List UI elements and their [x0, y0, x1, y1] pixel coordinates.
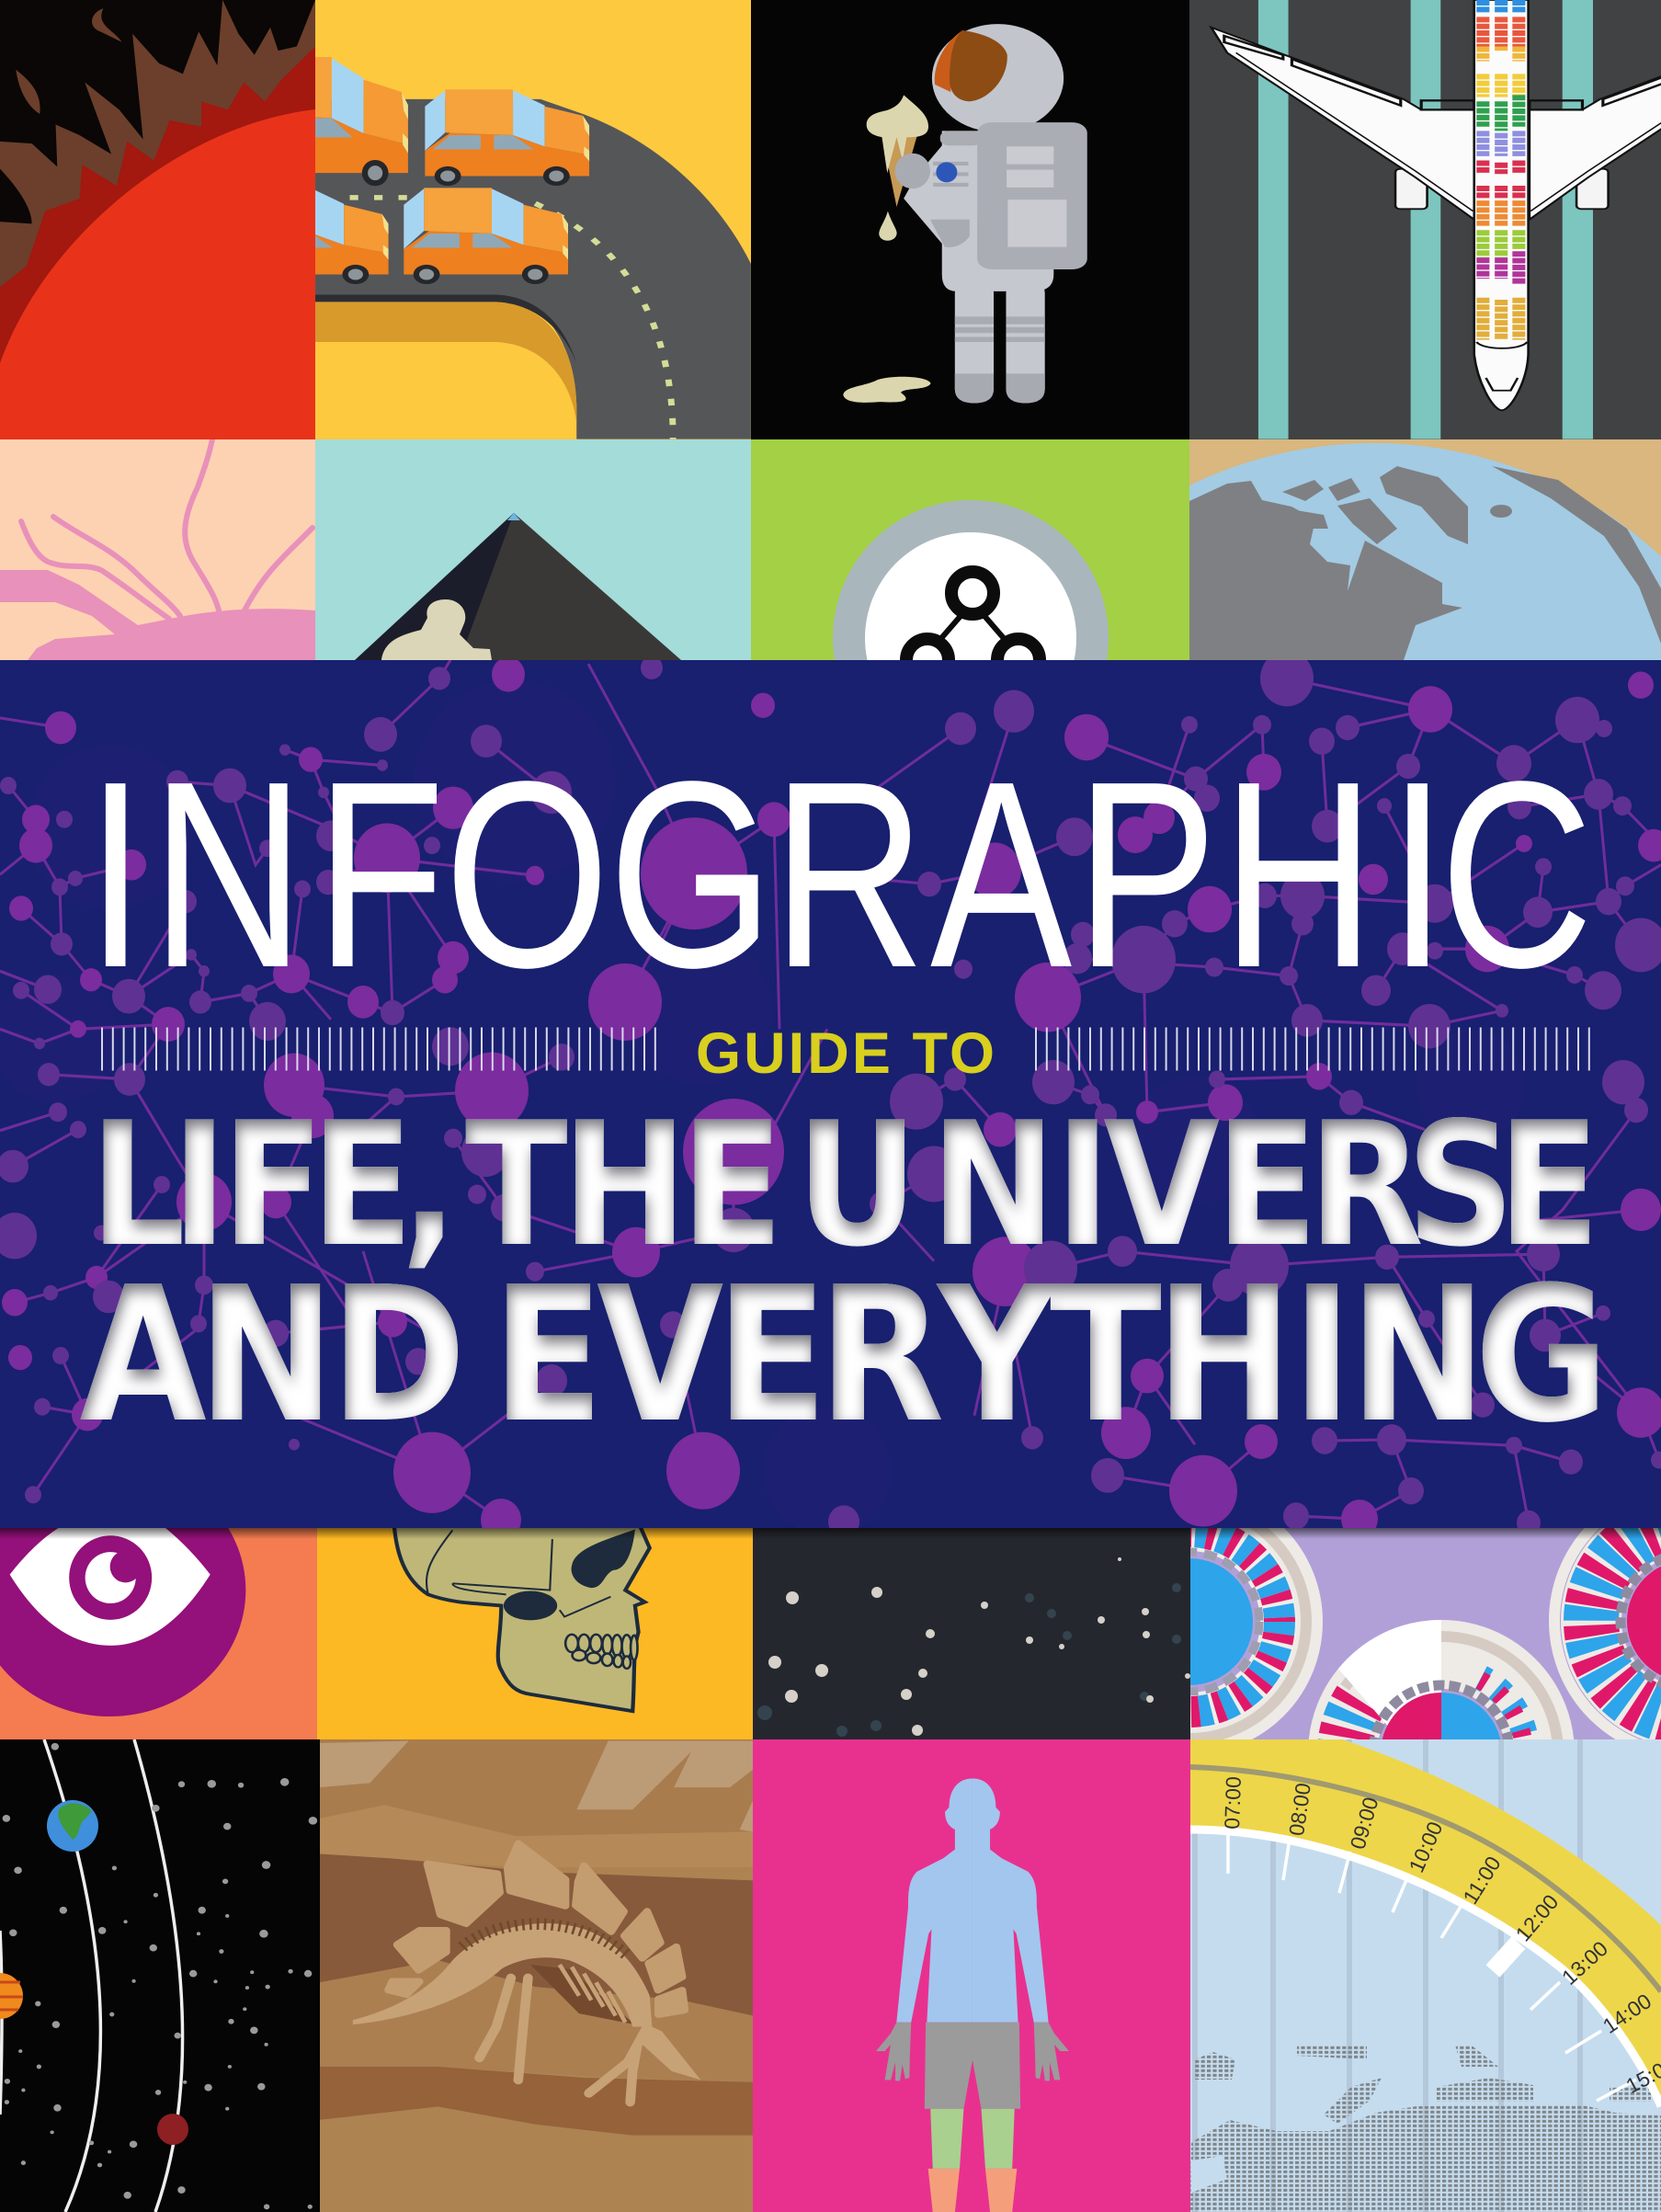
hour labels — [1220, 1776, 1661, 2098]
panel: astronaut with ice cream — [751, 0, 1189, 439]
panel: globe on tan — [1189, 439, 1661, 660]
ice cream cone — [843, 95, 931, 403]
Europe and Africa rim — [1492, 466, 1661, 644]
panel: solar system — [0, 1739, 320, 2212]
white disc — [865, 532, 1076, 744]
hour labels: 14:00 — [1598, 1989, 1655, 2038]
panel: network icon on green — [751, 439, 1189, 660]
dotted world map — [1190, 2045, 1661, 2212]
eye white — [10, 1528, 210, 1646]
hour labels: 13:00 — [1557, 1936, 1612, 1990]
astronaut arm — [895, 145, 977, 247]
background stripes — [1195, 1739, 1580, 2212]
yellow dial band — [1190, 1739, 1661, 2106]
skull — [394, 1526, 650, 1711]
icon: red sun — [0, 109, 315, 439]
panel: human body on pink — [753, 1739, 1190, 2212]
panel: circular charts on lavender — [1190, 1528, 1661, 1739]
panel: title banner — [0, 660, 1661, 1528]
network nodes muted — [0, 650, 1661, 1538]
stegosaurus plates — [388, 1843, 685, 2014]
cars — [224, 57, 589, 284]
icon: dark gap in flames — [0, 169, 32, 223]
stegosaurus gut shadow — [530, 1965, 635, 2024]
hour labels: 07:00 — [1220, 1776, 1246, 1830]
Iceland — [1490, 505, 1512, 518]
panel: pyramid on cyan — [315, 439, 751, 660]
dial white rim — [1190, 1830, 1661, 2106]
panel: night sky stars — [753, 1528, 1190, 1739]
faint background blobs — [0, 680, 1526, 1535]
map gaps — [1191, 2156, 1227, 2193]
road kerb — [315, 295, 576, 363]
body: right half — [973, 1778, 1069, 2212]
panel: eye on coral — [0, 1528, 317, 1739]
sun limb with flare — [0, 570, 315, 660]
divider ruler left — [101, 1028, 658, 1070]
astronaut helmet — [932, 24, 1064, 132]
chart: left radial — [1070, 1502, 1309, 1741]
sphinx — [381, 599, 492, 660]
subtitle: GUIDE TO: GUIDE TO — [696, 1021, 995, 1086]
panel: clock dial over dotted world map — [1190, 1739, 1661, 2212]
Arctic islands — [1282, 478, 1397, 544]
North America — [1189, 481, 1462, 660]
iris — [69, 1535, 152, 1620]
globe ocean — [951, 443, 1661, 1287]
planet: Mars — [157, 2114, 188, 2145]
hour labels: 12:00 — [1511, 1890, 1563, 1945]
panel: sun on black — [0, 0, 315, 439]
dim stars — [757, 1583, 1181, 1737]
icon: flame wisps — [16, 8, 122, 114]
hour labels: 08:00 — [1284, 1782, 1315, 1837]
panel: fossil stegosaurus — [320, 1739, 753, 2212]
seat rows — [1483, 0, 1519, 340]
dial inner track — [1190, 1767, 1661, 1991]
chart: right radial — [1554, 1488, 1661, 1754]
panel: traffic road on yellow — [315, 0, 751, 439]
gray disc — [833, 500, 1109, 776]
aeroplane — [1212, 0, 1661, 410]
title: LIFE, THE UNIVERSE: LIFE, THE UNIVERSE — [90, 1086, 1600, 1285]
planet: Earth — [47, 1800, 98, 1852]
panel: aeroplane seat map on runway — [1189, 0, 1661, 439]
road — [315, 99, 751, 439]
stegosaurus skeleton — [353, 1923, 700, 2103]
orbit lines — [0, 1739, 183, 2212]
planet: orange giant — [0, 1973, 23, 2019]
skull details — [427, 1530, 638, 1669]
network lines — [0, 660, 1661, 1522]
purple disc — [0, 1464, 245, 1716]
network nodes bright — [2, 657, 1661, 1541]
bright stars — [768, 1557, 1190, 1736]
panel: solar flares on peach — [0, 439, 315, 660]
hour labels: 09:00 — [1346, 1795, 1382, 1852]
icon: red inner flames — [0, 47, 315, 363]
chart: centre radial — [1309, 1620, 1574, 1739]
star field — [3, 1743, 317, 2209]
body: left half — [876, 1778, 973, 2212]
astronaut backpack — [940, 122, 1087, 269]
hour labels: 10:00 — [1404, 1818, 1448, 1876]
banner drop shadow — [0, 1528, 1661, 1539]
Greenland — [1380, 466, 1468, 544]
hour labels: 11:00 — [1458, 1852, 1506, 1909]
rock strata — [320, 1739, 753, 2136]
divider ruler right — [1035, 1028, 1594, 1070]
solar flare tendrils — [21, 439, 313, 619]
hour ticks — [1228, 1834, 1636, 2101]
network icon — [906, 572, 1040, 681]
pyramid — [355, 513, 681, 660]
road dashes — [349, 198, 673, 439]
road shadow — [315, 302, 576, 422]
astronaut body and legs — [942, 131, 1053, 404]
runway stripes — [1258, 0, 1593, 439]
panel: skull on orange — [317, 1528, 753, 1739]
title: INFOGRAPHIC: INFOGRAPHIC — [86, 726, 1593, 1023]
icon: brown outer flames — [0, 0, 315, 337]
title: AND EVERYTHING: AND EVERYTHING — [80, 1248, 1610, 1465]
